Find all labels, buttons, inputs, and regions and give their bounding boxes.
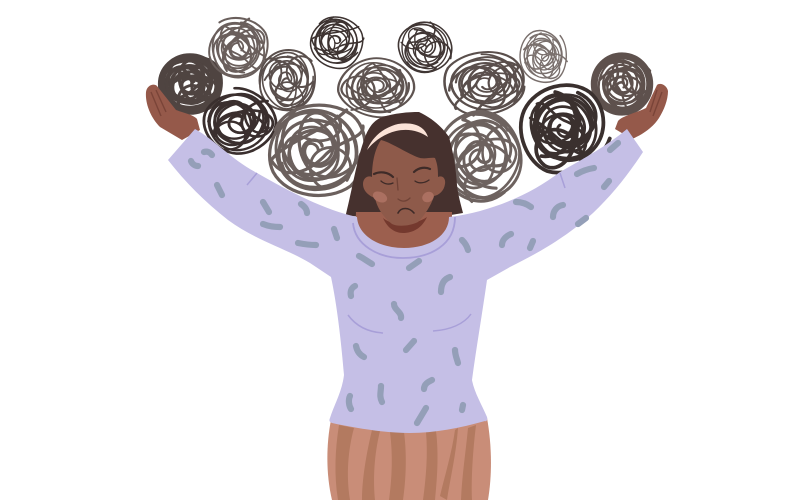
scribble 13 bbox=[425, 96, 535, 218]
sweater dashes bbox=[191, 143, 618, 423]
scribble 3 bbox=[253, 43, 321, 118]
scribble 1 bbox=[152, 47, 229, 121]
sleeve and chest creases bbox=[247, 173, 565, 333]
scribble 9 bbox=[434, 43, 536, 123]
scribble 6 bbox=[270, 105, 365, 196]
chin shadow bbox=[383, 217, 427, 233]
scribble 12 bbox=[502, 68, 626, 189]
neck bbox=[354, 212, 452, 262]
pants stripes bbox=[335, 425, 476, 500]
scribble 8 bbox=[390, 13, 460, 81]
face bbox=[363, 140, 445, 226]
scribble 10 bbox=[516, 26, 570, 87]
pants bbox=[327, 418, 491, 500]
collar line bbox=[353, 217, 455, 258]
scribbles: tangled thoughts cloud bbox=[152, 10, 655, 218]
scribble 2 bbox=[205, 15, 271, 83]
frown bbox=[398, 208, 414, 213]
eyebrows bbox=[374, 168, 430, 177]
cheeks bbox=[371, 189, 389, 205]
nose bbox=[397, 178, 410, 201]
scribble 4 bbox=[305, 10, 369, 75]
closed eyes bbox=[381, 180, 429, 184]
left hand bbox=[146, 85, 200, 140]
sweater bbox=[168, 129, 643, 433]
right hand bbox=[615, 84, 668, 139]
scribble 5 bbox=[192, 79, 287, 165]
hair bbox=[346, 112, 463, 218]
hairband bbox=[367, 123, 428, 150]
scribble 11 bbox=[590, 51, 655, 117]
scribble 7 bbox=[329, 50, 423, 124]
